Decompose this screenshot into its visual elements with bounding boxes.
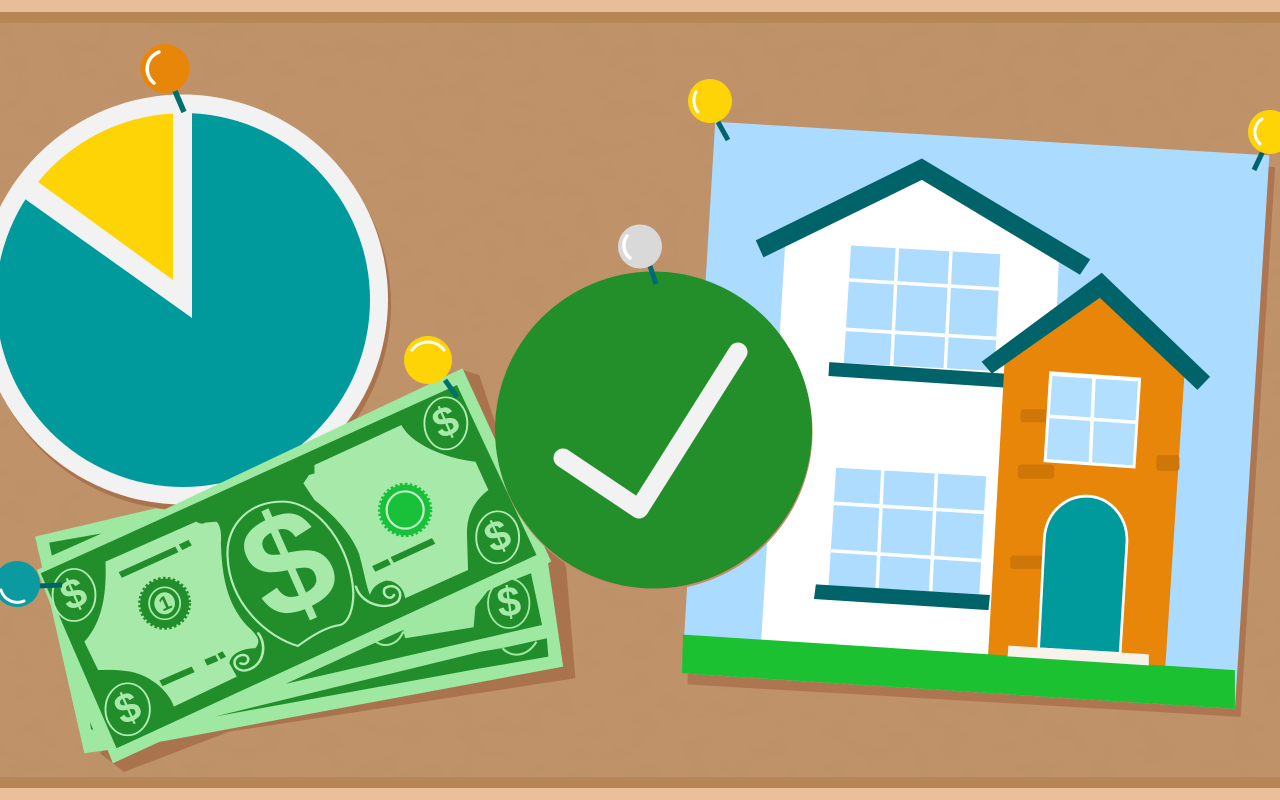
badge disc: [495, 272, 812, 588]
bill lettering: dollar signs and denomination: [53, 395, 524, 734]
door step: [1008, 646, 1149, 665]
upper ledge: [828, 362, 1005, 387]
upper window: [844, 246, 1000, 371]
corner dollar signs: $: [477, 509, 518, 562]
corner dollar signs: $: [53, 567, 94, 620]
corner seals: [53, 397, 519, 735]
lower ledge: [814, 584, 990, 610]
panel: dollar bills: [35, 368, 575, 772]
main house wall: [761, 175, 1059, 656]
door: [1039, 496, 1127, 654]
panel: house picture: [682, 122, 1275, 717]
bottom bill: [35, 508, 563, 753]
serial bars: [120, 541, 434, 683]
top bill paper: [37, 368, 551, 763]
pin: grey on badge: [618, 224, 662, 284]
back bill dark slivers: [49, 533, 548, 730]
corner dollar signs: $: [107, 681, 148, 734]
back bill corner seals: [376, 579, 536, 655]
pie shadow: [0, 100, 391, 510]
sky paper: [682, 122, 1269, 709]
denomination one: 1: [156, 592, 175, 616]
panel: green check badge: [495, 272, 812, 590]
panel: pie chart: [0, 80, 391, 510]
lower window: [828, 468, 986, 594]
pin: orange: [140, 44, 190, 112]
tower window: [1044, 371, 1141, 469]
scroll curls: [234, 586, 400, 671]
pin: teal on bills: [0, 561, 62, 607]
right seal: [380, 485, 430, 535]
paper shadow: [688, 166, 1275, 717]
left light panel: [84, 522, 258, 707]
top bill dark field: [41, 385, 536, 748]
bills shadow: [100, 370, 575, 772]
pie white disc: [0, 94, 388, 504]
corner dollar signs: [53, 395, 524, 734]
pin: yellow on bills: [404, 336, 457, 397]
main roof: [756, 159, 1090, 275]
corner dollar signs: $: [425, 395, 466, 448]
teal slice: [0, 113, 370, 487]
pin: yellow top left of house: [688, 79, 732, 140]
right light panel: [303, 425, 488, 598]
check mark: [563, 352, 738, 509]
orange tower wall: [988, 290, 1184, 667]
pin: yellow top right of house: [1248, 110, 1280, 170]
corner dollar signs: $: [494, 577, 524, 626]
left seal: [140, 579, 189, 628]
white gap wedge: [10, 94, 192, 318]
central dollar sign: $: [218, 472, 358, 654]
badge shadow: [496, 274, 812, 590]
yellow slice: [38, 114, 173, 280]
central oval: [227, 502, 353, 646]
tower roof: [982, 273, 1210, 390]
bricks: [1010, 409, 1179, 569]
grass: [682, 635, 1235, 709]
